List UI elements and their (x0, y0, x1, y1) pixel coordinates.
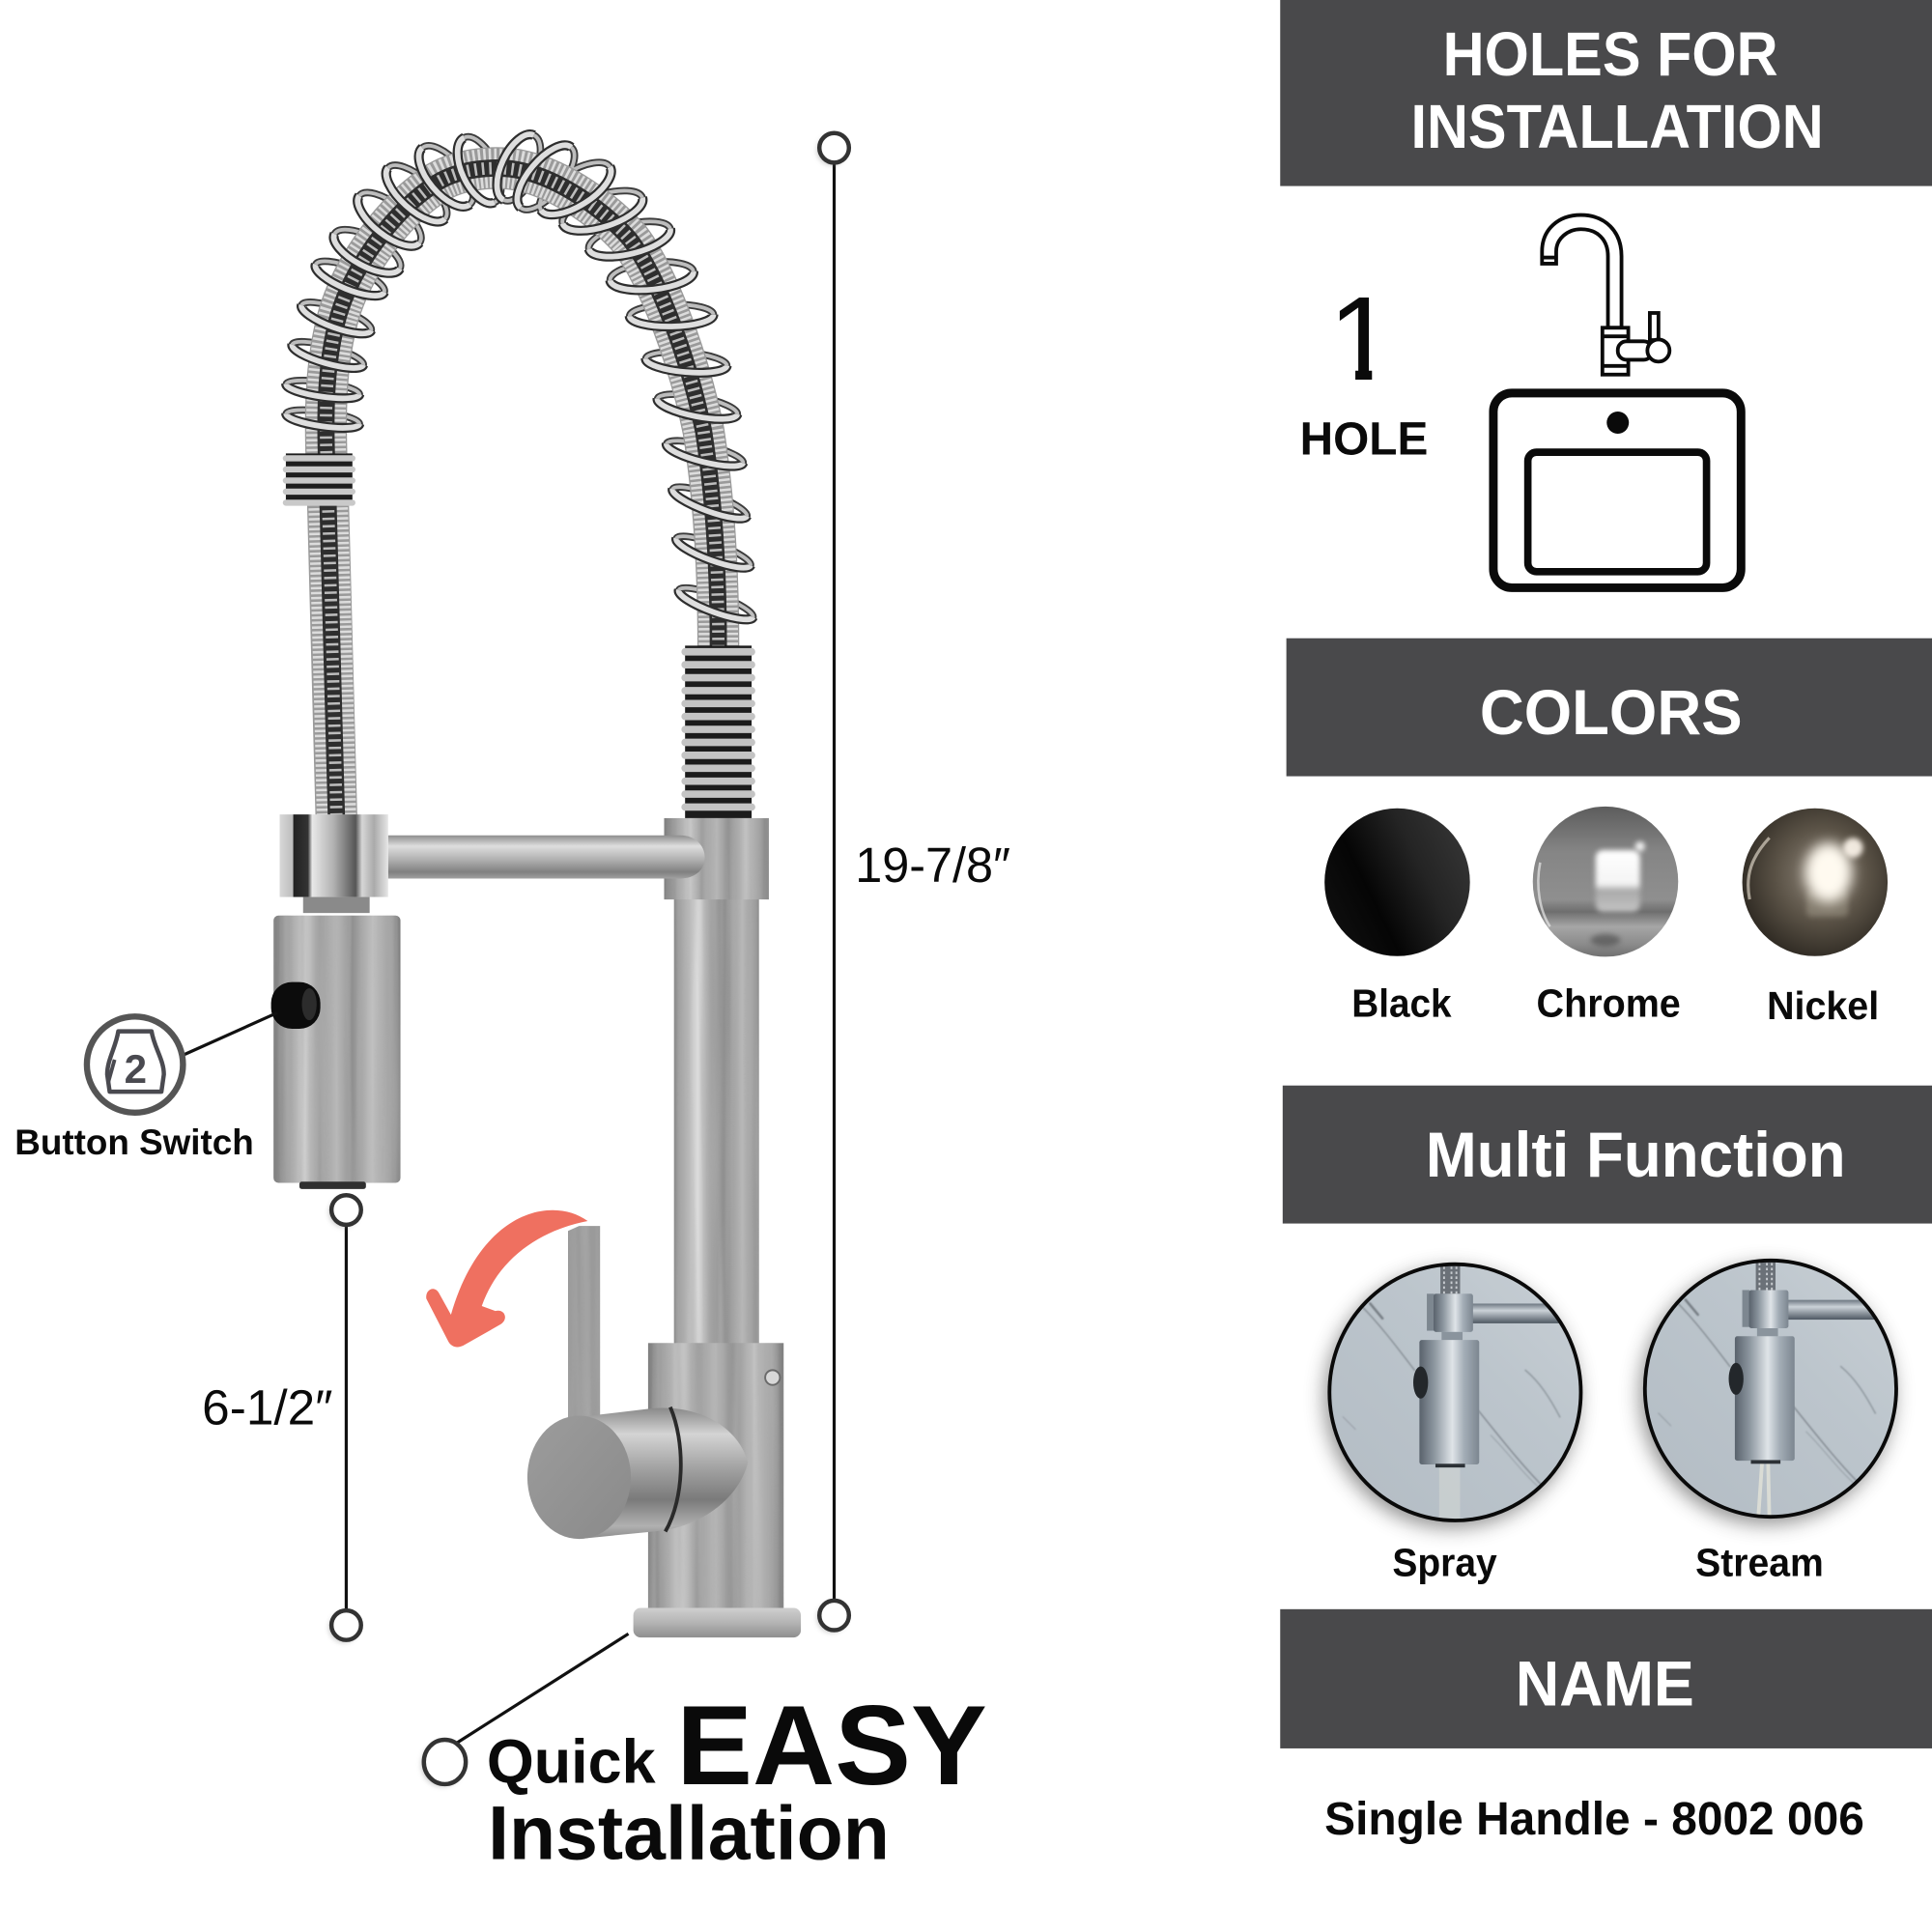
hub groove (666, 1407, 681, 1531)
label: spray: Spray (1392, 1540, 1497, 1584)
label: stream: Stream (1695, 1540, 1824, 1584)
horizontal arm (388, 836, 705, 878)
callout: quick easy installation: EASY (676, 1682, 987, 1808)
compressed spring left (286, 453, 353, 505)
button on spray head (271, 982, 321, 1029)
swatch: nickel (1743, 809, 1888, 956)
panel: colors (1287, 639, 1932, 1028)
braided hose (326, 168, 719, 815)
panel: multi function (1283, 1086, 1932, 1584)
label: black: Black (1351, 980, 1452, 1025)
heading band (1287, 639, 1932, 777)
spring coil back loops (285, 128, 755, 625)
base plate (634, 1608, 801, 1637)
label: hole: HOLE (1300, 413, 1428, 466)
label: spout reach: 6-1/2″ (202, 1379, 332, 1435)
dimension: overall height (817, 133, 849, 1633)
icon: faucet (1542, 215, 1669, 375)
spring coil front loops (285, 128, 753, 625)
swatch: black (1324, 809, 1470, 956)
panel: name (1280, 1609, 1932, 1845)
icon: button switch (87, 1016, 183, 1113)
left bracket (280, 814, 388, 897)
label: button switch: Button Switch (14, 1122, 254, 1162)
heading band (1280, 0, 1932, 186)
heading band (1280, 1609, 1932, 1748)
icon: sink (1493, 393, 1741, 587)
handle hub (579, 1408, 748, 1539)
label: nickel: Nickel (1767, 983, 1879, 1028)
callout: button switch (14, 1012, 277, 1162)
label: chrome: Chrome (1537, 980, 1681, 1025)
callout: quick easy installation: Quick (487, 1727, 656, 1797)
heading text: COLORS (1480, 677, 1743, 749)
spray head (273, 916, 401, 1182)
handle face (527, 1416, 631, 1539)
callout: quick easy installation: Installation (488, 1790, 890, 1876)
compressed spring right (685, 645, 752, 818)
right collar (665, 818, 769, 899)
function: stream (1640, 1253, 1901, 1524)
spray nozzle (299, 1181, 366, 1189)
heading text (1410, 19, 1824, 161)
product name: Single Handle - 8002 006 (1324, 1793, 1864, 1845)
heading text: HOLES FOR (1443, 19, 1778, 89)
heading text: NAME (1516, 1648, 1694, 1719)
function: spray (1324, 1257, 1586, 1528)
neck (303, 897, 370, 913)
heading text: INSTALLATION (1410, 92, 1824, 161)
number of holes: 1 (1328, 272, 1395, 406)
icon: button switch: 2 (125, 1046, 147, 1092)
dimension: spout reach (329, 1195, 361, 1642)
heading text: Multi Function (1426, 1120, 1846, 1191)
arrow: rotate handle (426, 1210, 587, 1347)
callout: quick easy installation (421, 1634, 987, 1876)
heading band (1283, 1086, 1932, 1224)
lever handle (568, 1226, 600, 1430)
faucet illustration (271, 128, 801, 1637)
swatch: chrome (1533, 807, 1678, 956)
base cylinder (648, 1343, 783, 1609)
panel: holes for installation (1280, 0, 1932, 587)
main tube (674, 894, 759, 1347)
label: overall height: 19-7/8″ (855, 838, 1010, 893)
screw (765, 1370, 780, 1385)
